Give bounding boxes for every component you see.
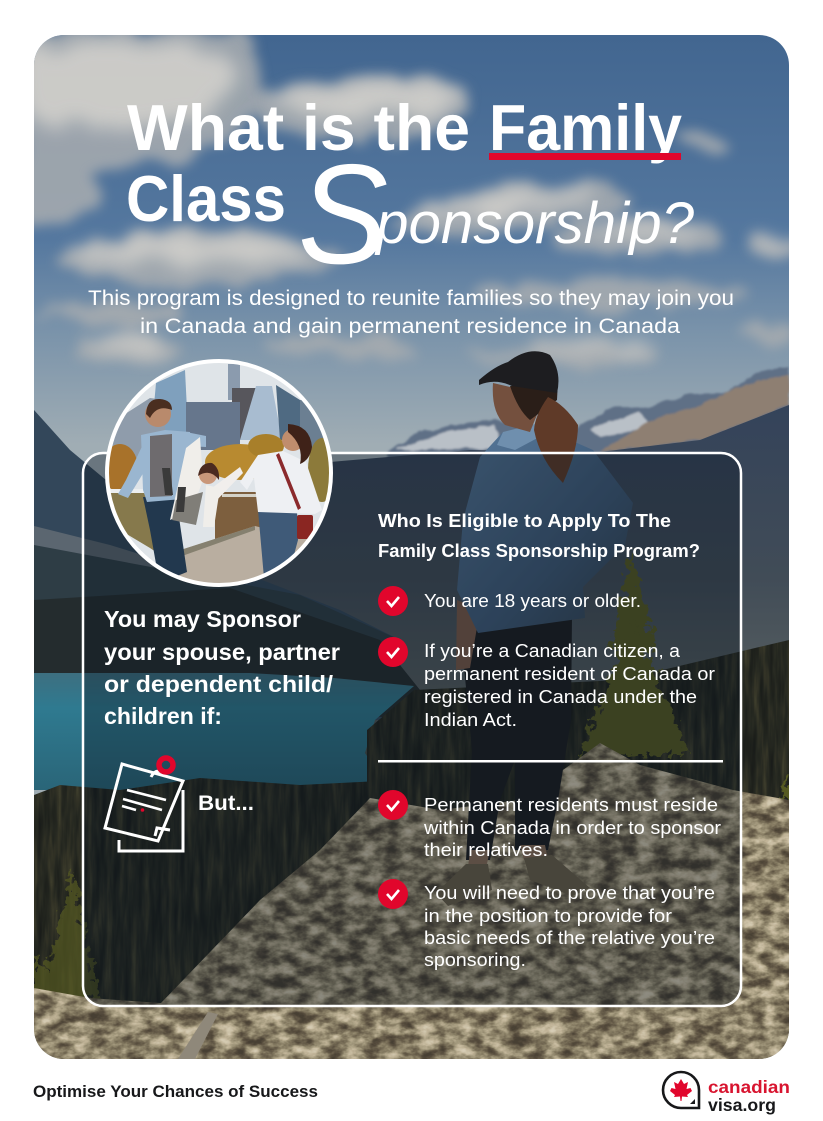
title: ponsorship?: [374, 191, 695, 256]
turquoise lake: [34, 673, 414, 790]
heading: who is eligible: Family Class Sponsorship Program?: [378, 540, 700, 561]
overlay darkening the eligibility box: [83, 453, 741, 1006]
text: financial condition: sponsoring.: [424, 949, 526, 970]
icon: check 1: [378, 586, 408, 616]
footer tagline: Optimise Your Chances of Success: [33, 1082, 318, 1101]
title: [126, 91, 695, 294]
text: residence condition: Permanent residents must reside: [424, 794, 718, 815]
logo: canadianvisa.org: visa.org: [708, 1095, 776, 1115]
skyline: [154, 370, 187, 432]
child: [170, 437, 203, 520]
logo: canadianvisa.org: [663, 1072, 790, 1115]
bridge deck: [178, 526, 307, 583]
left text: who you may sponsor: or dependent child/: [104, 671, 334, 697]
divider: [378, 760, 723, 762]
forest below lake: [34, 778, 367, 1003]
left text: who you may sponsor: [104, 606, 340, 729]
cap: [479, 351, 558, 393]
logo: canadianvisa.org: canadian: [708, 1077, 790, 1097]
heading: who is eligible: Who Is Eligible to Apply To The: [378, 510, 671, 531]
text: residence condition: within Canada in order to sponsor: [423, 817, 721, 838]
title underline: [489, 153, 681, 160]
jacket: [457, 430, 633, 633]
text: status requirement: [424, 640, 715, 730]
photo: family walking in the city: [105, 359, 333, 587]
icon: check 3: [378, 790, 408, 820]
left mountain: [34, 410, 400, 720]
title: S: [298, 135, 388, 294]
icon: check 4: [378, 879, 408, 909]
illustration: woman seen from behind: [436, 351, 633, 906]
text: status requirement: If you’re a Canadian citizen, a: [424, 640, 681, 661]
text: status requirement: Indian Act.: [424, 709, 517, 730]
text: status requirement: permanent resident of Canada or: [424, 663, 715, 684]
title: Class: [126, 162, 286, 235]
text: financial condition: [424, 882, 715, 970]
subtitle: [88, 286, 734, 338]
title: What is the: [127, 91, 470, 164]
mid slopes: [260, 405, 789, 756]
text: status requirement: registered in Canada under the: [424, 686, 697, 707]
clouds: highlight layer: [20, 45, 790, 355]
icon: maple leaf pin: [663, 1072, 699, 1108]
yellow-green trees: [34, 870, 100, 1000]
forest behind lake: [34, 588, 420, 720]
heading: who is eligible: [378, 510, 700, 561]
left text: who you may sponsor: your spouse, partner: [104, 639, 340, 665]
clouds: shadow layer: [20, 30, 798, 366]
far right forest: [367, 640, 789, 810]
legs: [460, 615, 572, 860]
man: [143, 497, 187, 578]
ponytail: [534, 397, 578, 483]
text: financial condition: in the position to provide for: [424, 905, 672, 926]
text: residence condition: their relatives.: [424, 839, 548, 860]
boots: [436, 855, 590, 906]
neck and face: [492, 383, 537, 432]
distant snowy mountains: [386, 366, 789, 457]
autumn trees: [109, 444, 136, 489]
text: residence condition: [423, 794, 721, 860]
text: financial condition: You will need to prove that you’re: [424, 882, 715, 903]
subtitle: This program is designed to reunite families so they may join you: [88, 286, 734, 310]
railing mesh: [110, 493, 154, 550]
label: But...: But...: [198, 792, 254, 815]
left text: who you may sponsor: children if:: [104, 703, 222, 729]
text: financial condition: basic needs of the relative you’re: [424, 927, 715, 948]
left text: who you may sponsor: You may Sponsor: [104, 606, 301, 632]
title: Family: [489, 91, 682, 164]
icon: pinned note: [105, 758, 183, 851]
panel: eligibility box outline: [83, 453, 741, 1006]
woman: [258, 510, 298, 578]
arm: [456, 600, 476, 670]
text: age requirement: You are 18 years or older.: [424, 590, 641, 611]
hair: [510, 386, 558, 420]
rock outcrop: [34, 743, 789, 1059]
icon: check 2: [378, 637, 408, 667]
subtitle: in Canada and gain permanent residence in Canada: [140, 314, 680, 338]
ankles: [468, 845, 547, 864]
